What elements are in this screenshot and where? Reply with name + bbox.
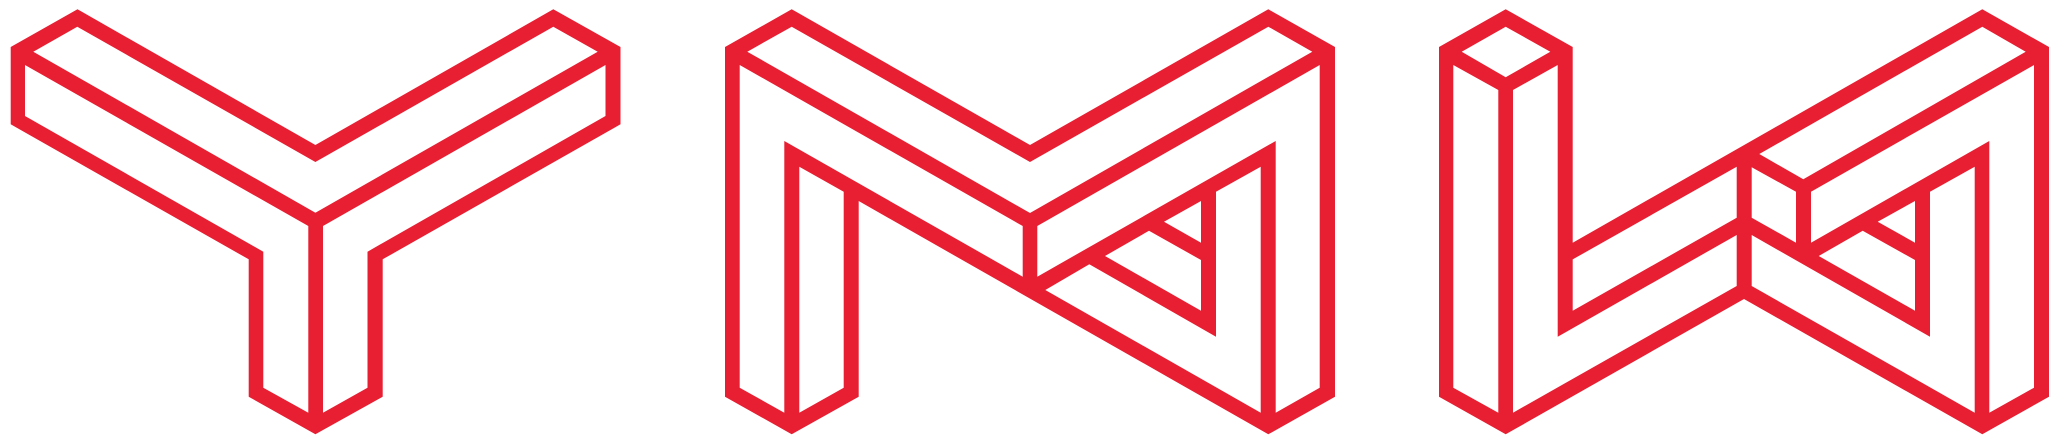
letter: first isometric Y shape: [11, 9, 620, 434]
letter: third isometric M shape with capped left pillar: [1439, 9, 2049, 434]
letter: second isometric M shape: [725, 9, 1335, 434]
